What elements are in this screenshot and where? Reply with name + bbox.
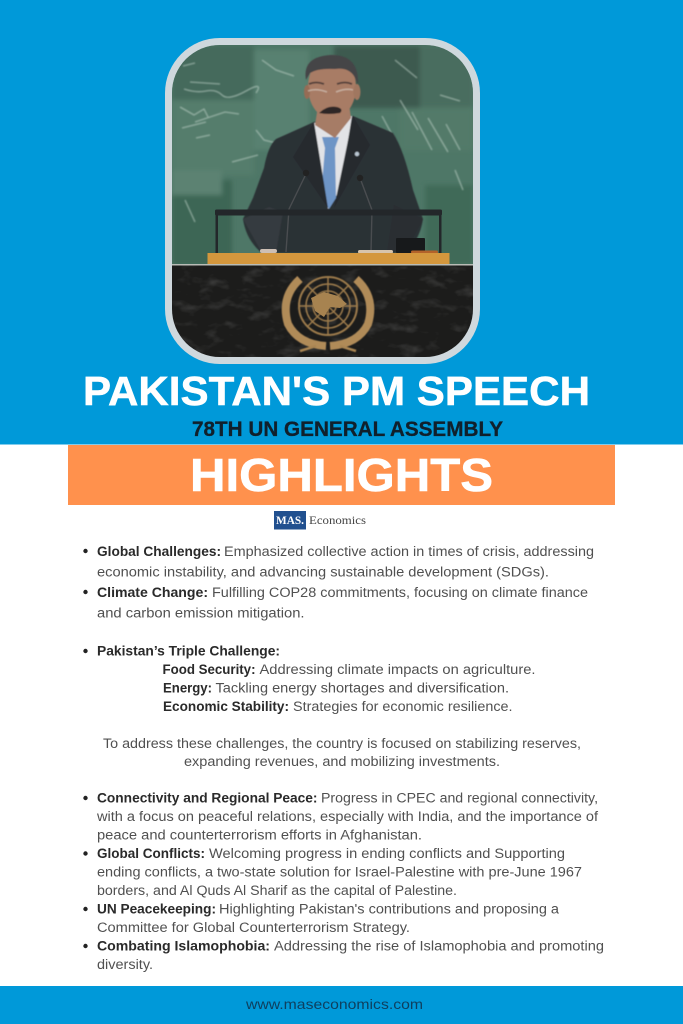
centered note bbox=[103, 736, 581, 769]
bullet: combating Islamophobia: Addressing the rise of Islamophobia and promoting bbox=[274, 938, 604, 954]
bullet: Pakistan's triple challenge: Addressing climate impacts on agriculture. bbox=[260, 662, 536, 677]
bullet: UN peacekeeping: UN Peacekeeping: bbox=[97, 902, 216, 916]
bullet: connectivity and regional peace: peace and counterterrorism efforts in Afghanistan. bbox=[97, 828, 422, 842]
wooden top bbox=[208, 253, 450, 264]
bullet: connectivity and regional peace: with a focus on peaceful relations, especially with India, and the importance of bbox=[96, 809, 598, 824]
tie bbox=[321, 137, 339, 209]
bullet: UN peacekeeping bbox=[83, 902, 560, 935]
bullet: Pakistan's triple challenge: Economic Stability: bbox=[163, 699, 289, 714]
highlights banner bbox=[68, 445, 615, 505]
photo content bbox=[172, 45, 473, 358]
bullet: climate change: Climate Change: bbox=[97, 585, 208, 600]
footer: www.maseconomics.com bbox=[245, 996, 423, 1012]
bullet: connectivity and regional peace bbox=[83, 790, 598, 842]
bullet: Pakistan's triple challenge: Pakistan’s Triple Challenge: bbox=[97, 644, 280, 658]
podium bbox=[172, 264, 473, 266]
highlights banner: HIGHLIGHTS bbox=[190, 449, 493, 501]
jacket bbox=[243, 55, 423, 253]
bullet: Pakistan's triple challenge: Strategies for economic resilience. bbox=[293, 699, 512, 714]
bullet: Pakistan's triple challenge bbox=[83, 644, 536, 714]
bullet: climate change: and carbon emission mitigation. bbox=[97, 606, 304, 620]
footer bbox=[0, 986, 683, 1024]
bullet: Pakistan's triple challenge: Tackling energy shortages and diversification. bbox=[216, 680, 509, 696]
bullet: climate change: Fulfilling COP28 commitments, focusing on climate finance bbox=[212, 585, 588, 600]
bullet: global conflicts: Global Conflicts: bbox=[97, 846, 205, 861]
bullet: global conflicts: borders, and Al Quds Al Sharif as the capital of Palestine. bbox=[97, 883, 457, 898]
bullet: UN peacekeeping: Committee for Global Counterterrorism Strategy. bbox=[97, 920, 410, 935]
photo frame bbox=[165, 38, 480, 364]
UN emblem bbox=[286, 277, 370, 351]
rail bbox=[215, 210, 442, 216]
bullet: global challenges: Emphasized collective action in times of crisis, addressing bbox=[224, 544, 594, 559]
bullet: Pakistan's triple challenge: Energy: bbox=[163, 680, 212, 696]
bullet: global challenges: Global Challenges: bbox=[97, 544, 221, 559]
bullet: global challenges bbox=[83, 544, 594, 580]
centered note: expanding revenues, and mobilizing investments. bbox=[184, 754, 500, 769]
bullet: global conflicts bbox=[83, 846, 582, 898]
subtitle: 78TH UN GENERAL ASSEMBLY bbox=[192, 418, 503, 441]
hands and device bbox=[260, 249, 277, 253]
bullet: connectivity and regional peace: Connectivity and Regional Peace: bbox=[97, 790, 318, 806]
bullet: connectivity and regional peace: Progress in CPEC and regional connectivity, bbox=[321, 790, 598, 806]
bullet: combating Islamophobia bbox=[83, 938, 604, 972]
neck and head bbox=[315, 104, 351, 138]
shirt bbox=[314, 116, 352, 209]
bullet: UN peacekeeping: Highlighting Pakistan's contributions and proposing a bbox=[219, 902, 560, 916]
bullet: combating Islamophobia: diversity. bbox=[97, 957, 153, 972]
bullet: global challenges: economic instability, and advancing sustainable development (SDGs). bbox=[97, 564, 549, 580]
logo: MAS Economics bbox=[274, 511, 367, 530]
bullet: global conflicts: ending conflicts, a two-state solution for Israel-Palestine with pre-June 1967 bbox=[97, 864, 582, 880]
bullet: climate change bbox=[83, 585, 588, 620]
bullet: global conflicts: Welcoming progress in ending conflicts and Supporting bbox=[209, 846, 565, 861]
bullet: combating Islamophobia: Combating Islamophobia: bbox=[97, 938, 270, 954]
logo: MAS Economics: MAS. bbox=[276, 513, 304, 527]
photo: speaker at the UN podium bbox=[165, 38, 480, 364]
logo: MAS Economics: Economics bbox=[309, 515, 367, 527]
microphones bbox=[286, 174, 372, 252]
centered note: To address these challenges, the country is focused on stabilizing reserves, bbox=[103, 736, 581, 751]
header background bbox=[0, 0, 683, 444]
bullet: Pakistan's triple challenge: Food Security: bbox=[162, 662, 256, 677]
title: PAKISTAN'S PM SPEECH bbox=[83, 368, 590, 414]
lapels bbox=[313, 122, 328, 208]
